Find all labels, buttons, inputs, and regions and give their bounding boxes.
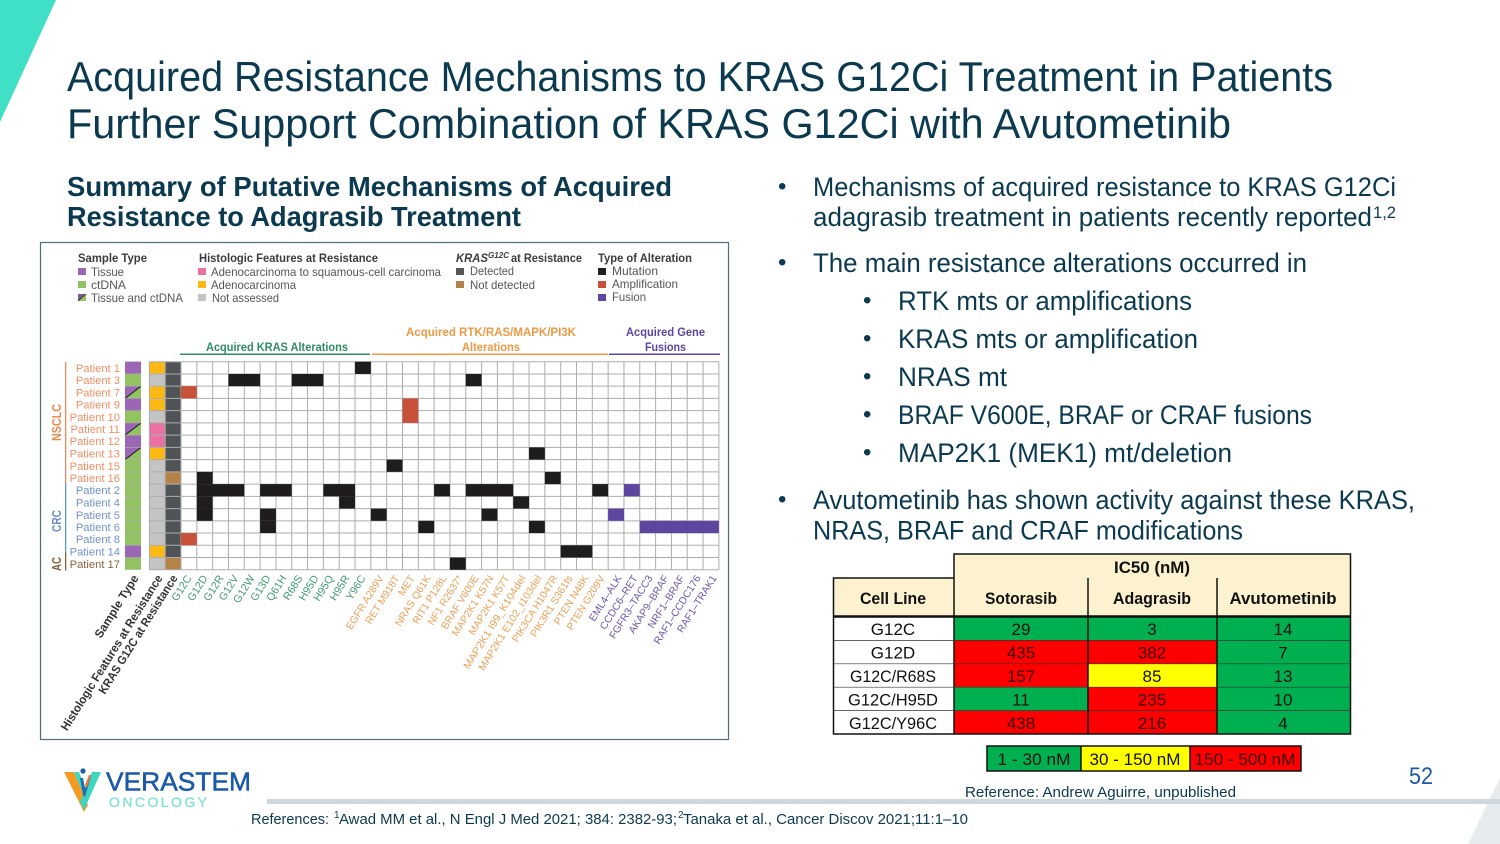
table values: 11 <box>1012 690 1030 710</box>
table values: G12C/H95D <box>848 690 938 710</box>
bullet list: resistance mechanisms: NRAS mt <box>898 362 1007 392</box>
axis labels: RTK/RAS/MAPK/PI3K alterations: MAP2K1 E102_I103del <box>477 574 545 673</box>
table values: 7 <box>1278 644 1288 662</box>
legend: type of alteration: Mutation <box>612 264 658 278</box>
fusion cells <box>608 484 719 533</box>
legend: histologic features: Adenocarcinoma <box>211 278 296 292</box>
axis labels: gene fusions: AKAP9–BRAF <box>627 574 672 636</box>
axis labels: KRAS alterations: G12W <box>231 573 258 606</box>
patient labels: Patient 13 <box>70 448 120 460</box>
table values: 382 <box>1138 644 1166 662</box>
legend: KRAS G12C at resistance: Not detected <box>470 278 535 292</box>
IC50 colour legend: 1 - 30 nM <box>998 750 1070 769</box>
axis labels: gene fusions: RAF1–TRAK1 <box>676 574 720 635</box>
legend: histologic features: Histologic Features at Resistance <box>199 251 378 265</box>
title: Acquired Resistance Mechanisms to KRAS G12Ci Treatment in Patients <box>67 53 1333 100</box>
table values: 3 <box>1147 620 1157 639</box>
table values: 216 <box>1138 714 1166 733</box>
legend: KRAS G12C at resistance: Detected <box>470 264 514 278</box>
axis labels: KRAS alterations: G12R <box>201 573 227 604</box>
axis labels: RTK/RAS/MAPK/PI3K alterations: PTEN N48K <box>552 574 592 627</box>
axis labels: annotation columns: KRAS G12C at Resistance <box>96 572 181 697</box>
axis labels: RTK/RAS/MAPK/PI3K alterations: MAP2K1 K57T <box>467 573 513 637</box>
bullet list: resistance mechanisms: • <box>863 439 871 466</box>
bullet list: resistance mechanisms: BRAF V600E, BRAF or CRAF fusions <box>898 400 1312 430</box>
table header cells: Cell Line <box>860 590 926 608</box>
icon: Verastem V mark <box>64 768 101 812</box>
group header: acquired gene fusions <box>609 325 720 355</box>
chart heading <box>67 171 672 232</box>
bullet list: resistance mechanisms: • <box>863 287 871 314</box>
axis labels: KRAS alterations: G12D <box>185 573 211 604</box>
bullet list: resistance mechanisms: KRAS mts or amplification <box>898 324 1198 354</box>
axis labels: annotation columns: Sample Type <box>92 572 142 641</box>
table values: G12C/R68S <box>850 667 936 686</box>
legend: type of alteration: Amplification <box>612 277 678 291</box>
patient labels: Patient 9 <box>76 400 120 412</box>
axis labels: KRAS alterations: H95Q <box>311 573 337 604</box>
table values: G12C/Y96C <box>849 714 937 733</box>
patient labels: Patient 12 <box>70 436 120 448</box>
patient labels: Patient 8 <box>76 534 120 546</box>
axis labels: KRAS alterations: R68S <box>281 573 306 603</box>
chart heading: Summary of Putative Mechanisms of Acquired <box>67 171 672 202</box>
axis labels: KRAS alterations: Q61H <box>264 573 290 604</box>
table values: 435 <box>1007 644 1035 662</box>
table values: 235 <box>1138 690 1166 710</box>
axis labels: KRAS alterations: Y96C <box>344 573 369 603</box>
footnote references: Tanaka et al., Cancer Discov 2021;11:1–10 <box>683 811 968 828</box>
axis labels: KRAS alterations: G12C <box>169 573 195 604</box>
axis labels: RTK/RAS/MAPK/PI3K alterations: PIK3R1 S361fs <box>529 574 576 639</box>
table values <box>848 620 1292 733</box>
table values: 4 <box>1278 714 1288 733</box>
bullet list: resistance mechanisms: Avutometinib has shown activity against these KRAS, <box>813 485 1415 515</box>
patient labels: Patient 5 <box>76 510 120 522</box>
table values: 10 <box>1274 690 1292 710</box>
logo: Verastem Oncology: VERASTEM <box>106 768 251 796</box>
table values: 29 <box>1012 620 1030 639</box>
axis labels: gene fusions: NRF1–BRAF <box>646 574 688 631</box>
table values: 13 <box>1274 667 1292 686</box>
patient labels: Patient 3 <box>76 375 120 387</box>
legend: histologic features: Not assessed <box>212 291 279 305</box>
patient labels: Patient 7 <box>76 388 120 400</box>
group header: acquired RTK/RAS/MAPK/PI3K alterations: Alterations <box>462 340 520 354</box>
axis labels: gene fusions: EML4–ALK <box>588 574 625 624</box>
cancer type labels and brackets: CRC <box>49 510 64 532</box>
axis labels: gene fusions: RAF1–CCDC176 <box>652 574 704 647</box>
axis labels: RTK/RAS/MAPK/PI3K alterations: NF1 R2637* <box>426 574 466 628</box>
axis labels: RTK/RAS/MAPK/PI3K alterations: MAP2K1 I99_K104del <box>462 574 529 671</box>
IC50 colour legend: 30 - 150 nM <box>1090 750 1180 769</box>
patient labels: Patient 15 <box>70 461 120 473</box>
patient labels: Patient 1 <box>76 363 120 375</box>
axis labels: gene fusions: CCDC6–RET <box>598 573 641 632</box>
axis labels: RTK/RAS/MAPK/PI3K alterations: PTEN G209V <box>565 574 608 633</box>
footnote references: References: <box>251 811 329 828</box>
axis labels: RTK/RAS/MAPK/PI3K alterations: EGFR A289V <box>344 574 387 632</box>
axis labels: RTK/RAS/MAPK/PI3K alterations: BRAF V600E <box>440 574 482 632</box>
cancer type labels and brackets: NSCLC <box>49 403 64 441</box>
legend: KRAS G12C at resistance: G12C <box>488 251 509 260</box>
footnote references: Awad MM et al., N Engl J Med 2021; 384: 2382-93; <box>339 811 677 828</box>
chart heading: Resistance to Adagrasib Treatment <box>67 201 521 232</box>
legend: sample type: ctDNA <box>91 278 126 292</box>
decoration: pale bottom right triangle <box>1468 778 1500 844</box>
bullet list: resistance mechanisms: • <box>778 486 786 513</box>
patient labels: Patient 10 <box>70 412 120 424</box>
legend: type of alteration: Type of Alteration <box>598 251 692 265</box>
panel: resistance heatmap <box>40 242 728 740</box>
table values: 14 <box>1274 620 1292 639</box>
axis labels: RTK/RAS/MAPK/PI3K alterations: RET M918T <box>364 573 403 627</box>
legend: KRAS G12C at resistance: at Resistance <box>511 251 582 265</box>
bullet list: resistance mechanisms: • <box>778 249 786 276</box>
table values: 85 <box>1143 667 1161 686</box>
axis labels: RTK/RAS/MAPK/PI3K alterations: MET <box>397 573 418 598</box>
bullet list: resistance mechanisms: RTK mts or amplifications <box>898 286 1192 316</box>
bullet list: resistance mechanisms: The main resistance alterations occurred in <box>813 248 1307 278</box>
legend: KRAS G12C at resistance: KRAS <box>456 251 488 265</box>
legend: sample type: Sample Type <box>78 251 147 265</box>
title <box>67 53 1333 147</box>
group header: acquired RTK/RAS/MAPK/PI3K alterations: Acquired RTK/RAS/MAPK/PI3K <box>406 325 576 339</box>
sample type row dividers <box>125 374 141 558</box>
logo: Verastem Oncology: ONCOLOGY <box>109 794 208 810</box>
footnote references: 1 <box>334 810 340 821</box>
histologic features column <box>150 362 166 570</box>
cancer type labels and brackets: AC <box>49 557 64 571</box>
table header cells: Adagrasib <box>1113 590 1191 608</box>
axis labels: RTK/RAS/MAPK/PI3K alterations: NRAS Q61K <box>394 574 434 629</box>
legend: type of alteration <box>598 251 692 304</box>
patient labels: Patient 16 <box>70 473 120 485</box>
legend: KRAS G12C at resistance <box>456 251 582 292</box>
bullet list: resistance mechanisms: NRAS, BRAF and CRAF modifications <box>813 516 1243 546</box>
decoration: teal corner triangle <box>0 0 56 122</box>
bullet list: resistance mechanisms <box>778 172 1415 546</box>
legend: sample type: Tissue <box>91 265 124 279</box>
bullet list: resistance mechanisms: adagrasib treatment in patients recently reported <box>813 202 1372 232</box>
page number: 52 <box>1409 763 1433 790</box>
patient labels: Patient 4 <box>76 498 120 510</box>
axis labels: KRAS alterations: G12V <box>217 573 242 603</box>
bullet list: resistance mechanisms: MAP2K1 (MEK1) mt/deletion <box>898 438 1232 468</box>
KRAS G12C status column <box>166 362 181 570</box>
bullet list: resistance mechanisms: • <box>863 325 871 352</box>
axis labels: KRAS alterations: H95D <box>297 573 322 603</box>
axis labels: RTK/RAS/MAPK/PI3K alterations: RIT1 P128L <box>411 574 450 626</box>
patient labels <box>70 363 120 571</box>
bullet list: resistance mechanisms: • <box>863 401 871 428</box>
table reference note: Reference: Andrew Aguirre, unpublished <box>965 784 1236 801</box>
table header cells: Avutometinib <box>1230 590 1336 608</box>
patient labels: Patient 6 <box>76 522 120 534</box>
title: Further Support Combination of KRAS G12Ci with Avutometinib <box>67 100 1231 147</box>
group header: acquired gene fusions: Acquired Gene <box>626 325 705 339</box>
table values: 157 <box>1007 667 1035 686</box>
cancer type labels and brackets <box>49 362 66 571</box>
IC50 colour legend <box>987 746 1301 771</box>
legend: sample type: Tissue and ctDNA <box>91 291 183 305</box>
table values: 438 <box>1007 714 1035 733</box>
axis labels: KRAS alterations: G13D <box>248 573 274 604</box>
table borders <box>834 554 1350 734</box>
table header cells: Sotorasib <box>985 590 1057 608</box>
group header: acquired RTK/RAS/MAPK/PI3K alterations <box>372 325 608 355</box>
decoration: footer bar <box>267 799 1500 804</box>
axis labels: KRAS alterations <box>169 573 369 606</box>
IC50 colour legend: 150 - 500 nM <box>1194 750 1296 769</box>
axis labels: KRAS alterations: H95R <box>328 573 353 603</box>
axis labels: RTK/RAS/MAPK/PI3K alterations <box>344 573 608 673</box>
group header: acquired KRAS alterations: Acquired KRAS Alterations <box>206 340 348 354</box>
table values: G12C <box>871 620 915 639</box>
mutation cells <box>197 362 608 570</box>
group header: acquired gene fusions: Fusions <box>645 340 686 354</box>
patient labels: Patient 14 <box>70 546 120 558</box>
axis labels: gene fusions <box>588 573 720 647</box>
sample type column <box>125 362 141 570</box>
table header cells <box>834 554 1350 616</box>
legend: histologic features: Adenocarcinoma to squamous-cell carcinoma <box>211 265 441 279</box>
bullet list: resistance mechanisms: • <box>863 363 871 390</box>
logo: Verastem Oncology <box>64 768 251 812</box>
axis labels: annotation columns: Histologic Features at Resistance <box>58 572 166 733</box>
axis labels: RTK/RAS/MAPK/PI3K alterations: PIK3CA H1047R <box>511 574 561 645</box>
legend: sample type <box>78 251 183 305</box>
legend: histologic features <box>198 251 441 305</box>
heatmap grid <box>149 362 719 570</box>
footnote references: 2 <box>678 810 684 821</box>
legend: type of alteration: Fusion <box>612 290 646 304</box>
table values: G12D <box>871 644 915 662</box>
IC50 table <box>834 554 1350 734</box>
footnote references <box>251 810 968 828</box>
bullet list: resistance mechanisms: Mechanisms of acquired resistance to KRAS G12Ci <box>813 172 1396 202</box>
bullet list: resistance mechanisms: • <box>778 173 786 200</box>
axis labels: RTK/RAS/MAPK/PI3K alterations: MAP2K1 K57N <box>451 574 497 638</box>
table value fills <box>954 617 1350 734</box>
axis labels: gene fusions: FGFR3–TACC3 <box>608 574 656 641</box>
amplification cells <box>181 386 418 545</box>
patient labels: Patient 17 <box>70 559 120 571</box>
table header cells: IC50 (nM) <box>1114 559 1190 577</box>
patient labels: Patient 2 <box>76 485 120 497</box>
patient labels: Patient 11 <box>70 424 120 436</box>
bullet list: resistance mechanisms: 1,2 <box>1373 203 1396 222</box>
